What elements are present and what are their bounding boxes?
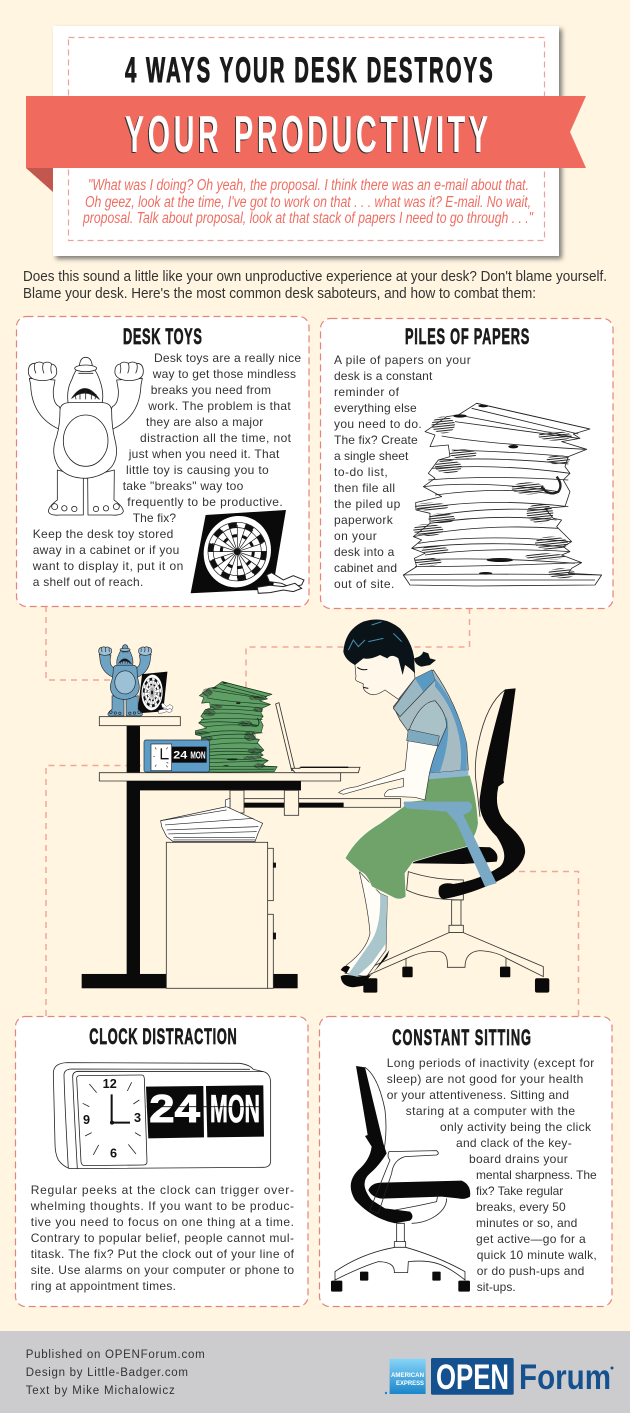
logo: OPEN Forum: OPEN [436, 1358, 509, 1397]
icon: flip clock: 24 [149, 1088, 201, 1131]
woman legs and shoes [341, 872, 389, 987]
under-desk papers [161, 798, 263, 842]
desk frame [127, 781, 301, 974]
woman face and neck [355, 647, 415, 699]
connector: piles of papers to green stack [246, 608, 470, 696]
title line 1: 4 WAYS YOUR DESK DESTROYS [125, 51, 493, 91]
heading: constant sitting: CONSTANT SITTING [392, 1025, 531, 1050]
office chair [363, 688, 549, 993]
laptop [276, 703, 360, 773]
constant sitting text: Long periods of inactivity (except for [387, 1056, 594, 1070]
desk clock [144, 740, 209, 772]
credits: Text by Mike Michalowicz [26, 1385, 175, 1397]
clock distraction text: Regular peeks at the clock can trigger over- [31, 1183, 294, 1197]
logo: American Express [385, 1359, 426, 1394]
piles of papers text: cabinet and [334, 561, 397, 575]
desk toys text: away in a cabinet or if you [33, 543, 179, 557]
piles of papers text: a single sheet [334, 449, 409, 463]
clock distraction text: titask. The fix? Put the clock out of your line of [31, 1247, 295, 1261]
piles of papers text: paperwork [334, 513, 394, 527]
panel: desk toys [16, 316, 309, 606]
piles of papers text [334, 353, 471, 591]
icon: toy monster [28, 357, 143, 515]
clock distraction text [30, 1183, 295, 1293]
constant sitting text: sit-ups. [477, 1280, 516, 1294]
desk shelf [99, 717, 180, 726]
panel: piles of papers [320, 318, 613, 608]
constant sitting text [387, 1056, 597, 1294]
icon: dartboard [191, 506, 304, 597]
desk toys text: frequently to be productive. [127, 495, 283, 509]
desk toys text: Desk toys are a really nice [154, 351, 301, 365]
footer [0, 1331, 630, 1413]
woman skirt [345, 775, 478, 899]
constant sitting text: quick 10 minute walk, [477, 1248, 597, 1262]
constant sitting text: and clack of the key- [456, 1136, 572, 1150]
clock distraction text: site. Use alarms on your computer or phone to [31, 1263, 294, 1277]
ribbon title: YOUR PRODUCTIVITY [125, 105, 488, 163]
desk toys text: way to get those mindless [152, 367, 296, 381]
woman hair [343, 619, 436, 688]
desk toys text: work. The problem is that [147, 399, 291, 413]
credits [26, 1349, 205, 1397]
intro text [23, 269, 607, 302]
panel: clock distraction [16, 1016, 308, 1306]
icon: flip clock: 9 [83, 1113, 90, 1127]
piles of papers text: to-do list, [334, 465, 388, 479]
piles of papers text: the piled up [334, 497, 401, 511]
illustration: desk [82, 645, 401, 988]
icon: flip clock: 12 [103, 1077, 117, 1091]
title card [26, 26, 586, 256]
icon: office chair [331, 1066, 470, 1292]
constant sitting text: or your attentiveness. Sitting and [387, 1088, 569, 1102]
icon: flip clock: 3 [134, 1111, 141, 1125]
desk toys text [32, 351, 301, 589]
panel: constant sitting [320, 1016, 612, 1306]
constant sitting text: only activity being the click [440, 1120, 592, 1134]
connector: constant sitting to chair [504, 872, 578, 1016]
piles of papers text: A pile of papers on your [334, 353, 471, 367]
heading: desk toys: DESK TOYS [123, 324, 202, 349]
logo: American Express: AMERICAN [391, 1372, 424, 1379]
piles of papers text: out of site. [334, 577, 394, 591]
desk toys text: they are also a major [146, 415, 263, 429]
piles of papers text: you need to do. [334, 417, 422, 431]
desk toys text: little toy is causing you to [126, 463, 269, 477]
desk toys text: Keep the desk toy stored [33, 527, 173, 541]
desk toys text: want to display it, put it on [32, 559, 183, 573]
intro text: Blame your desk. Here's the most common desk saboteurs, and how to combat them: [23, 286, 536, 302]
logo: OPEN Forum [431, 1358, 614, 1397]
icon: flip clock: 6 [110, 1146, 117, 1160]
toy on shelf [99, 645, 152, 716]
desk toys text: breaks you need from [151, 383, 271, 397]
chair armrest [404, 802, 497, 887]
clock distraction text: Contrary to popular belief, people cannot mul- [31, 1231, 294, 1245]
clock distraction text: whelming thoughts. If you want to be produc- [30, 1199, 294, 1213]
heading: clock distraction: CLOCK DISTRACTION [89, 1024, 237, 1049]
desk leg upper [127, 725, 140, 773]
filing cabinet [166, 842, 276, 988]
illustration: woman on chair [339, 619, 549, 993]
logo: American Express: EXPRESS [396, 1380, 425, 1387]
connector: clock distraction to clock [46, 766, 141, 1016]
piles of papers text: then file all [334, 481, 395, 495]
keyboard tray [230, 790, 401, 815]
icon: paper pile [403, 403, 602, 586]
ribbon fold [26, 168, 53, 192]
woman arm [339, 738, 438, 800]
quote [82, 177, 534, 227]
desk top [99, 773, 341, 781]
piles of papers text: everything else [334, 401, 417, 415]
constant sitting text: or do push-ups and [477, 1264, 584, 1278]
constant sitting text: minutes or so, and [476, 1216, 577, 1230]
desk toys text: a shelf out of reach. [33, 575, 143, 589]
clock distraction text: ring at appointment times. [31, 1279, 176, 1293]
icon: flip clock: MON [210, 1088, 260, 1131]
ribbon banner [26, 96, 586, 168]
piles of papers text: The fix? Create [334, 433, 418, 447]
piles of papers text: reminder of [334, 385, 400, 399]
desk toys text: just when you need it. That [128, 447, 280, 461]
connector: desk toys to toy [46, 606, 121, 680]
quote: "What was I doing? Oh yeah, the proposal. I think there was an e-mail about that. [88, 177, 529, 194]
constant sitting text: get active—go for a [476, 1232, 586, 1246]
woman blouse [393, 670, 468, 779]
green paper stack [190, 682, 277, 772]
logo: OPEN Forum: Forum [519, 1358, 611, 1397]
constant sitting text: sleep) are not good for your health [387, 1072, 583, 1086]
constant sitting text: breaks, every 50 [476, 1200, 566, 1214]
desk toys text: take "breaks" way too [123, 479, 244, 493]
constant sitting text: staring at a computer with the [406, 1104, 575, 1118]
credits: Design by Little-Badger.com [26, 1367, 188, 1379]
desk clock: MON [190, 751, 206, 762]
clock distraction text: tive you need to focus on one thing at a time. [31, 1215, 294, 1229]
desk toys text: The fix? [133, 511, 176, 525]
heading: piles of papers: PILES OF PAPERS [405, 324, 529, 349]
constant sitting text: fix? Take regular [476, 1184, 563, 1198]
piles of papers text: desk into a [334, 545, 395, 559]
desk toys text: distraction all the time, not [140, 431, 292, 445]
icon: flip clock [53, 1063, 271, 1169]
constant sitting text: board drains your [469, 1152, 568, 1166]
ribbon title: YOUR PRODUCTIVITY [124, 106, 487, 164]
desk clock: 24 [173, 750, 187, 762]
constant sitting text: mental sharpness. The [476, 1168, 597, 1182]
piles of papers text: desk is a constant [334, 369, 433, 383]
woman sleeve [407, 701, 447, 746]
credits: Published on OPENForum.com [26, 1349, 205, 1361]
dartboard on shelf [137, 670, 173, 715]
desk base [82, 974, 298, 988]
piles of papers text: on your [334, 529, 377, 543]
